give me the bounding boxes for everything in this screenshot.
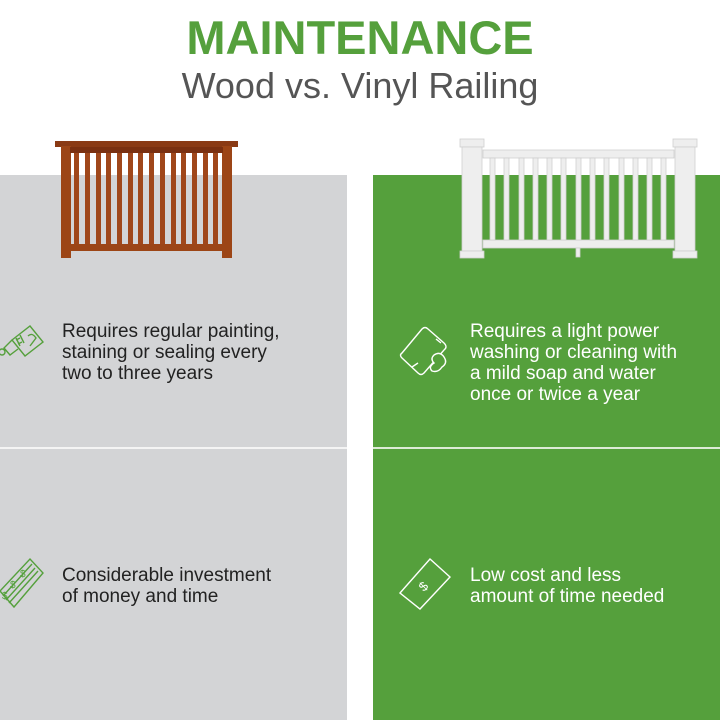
icon: dollar bill [399,558,451,610]
icon: money: $ [10,580,16,591]
title: MAINTENANCE [186,11,534,64]
text: vinyl cost [470,565,664,607]
icon: money: $ [20,569,26,580]
panel: vinyl [373,175,720,720]
text: wood painting: Requires regular painting, [62,321,280,342]
subtitle: Wood vs. Vinyl Railing [182,65,538,106]
text: wood painting [62,321,280,384]
text: vinyl cost: amount of time needed [470,586,664,607]
text: vinyl washing: washing or cleaning with [470,342,677,363]
text: vinyl washing [470,321,677,405]
text: wood painting: staining or sealing every [62,342,267,363]
text: vinyl washing: once or twice a year [470,384,640,405]
panel: wood [0,175,347,720]
icon: washing cloth [400,326,447,376]
text: wood cost: of money and time [62,586,218,607]
text: vinyl washing: a mild soap and water [470,363,656,384]
text: wood painting: two to three years [62,363,213,384]
icon: money [0,558,44,608]
icon: money: $ [2,591,8,602]
wood railing [55,141,238,258]
text: wood cost: Considerable investment [62,565,271,586]
text: vinyl washing: Requires a light power [470,321,659,342]
text: wood cost [62,565,271,607]
icon: dollar bill: $ [416,578,432,594]
vinyl railing [460,138,698,258]
text: vinyl cost: Low cost and less [470,565,621,586]
icon: paint brush [0,325,44,357]
